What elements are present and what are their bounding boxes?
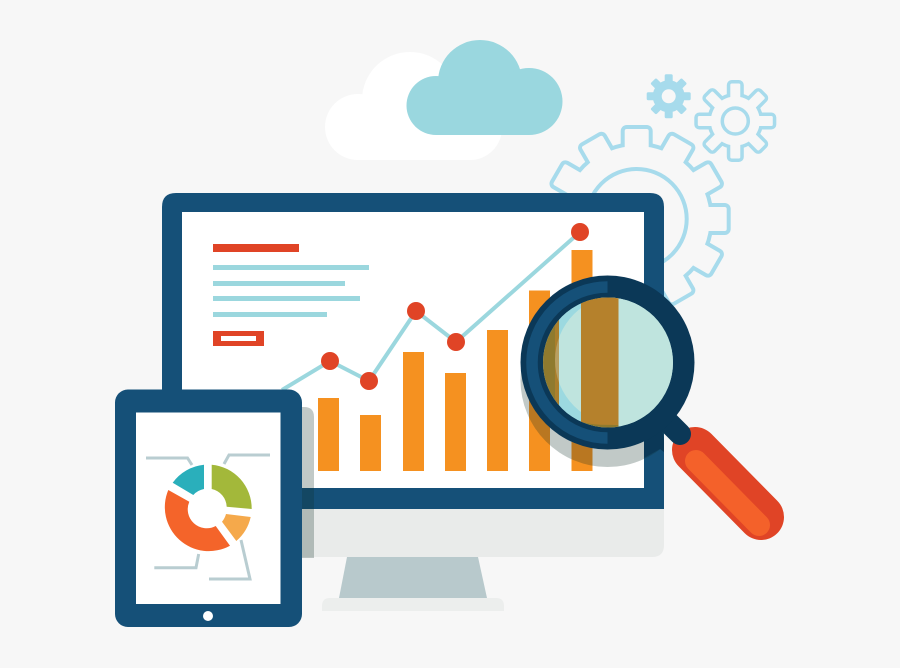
donut chart xyxy=(165,465,252,551)
blue cloud xyxy=(406,40,562,135)
icon: large gear outline xyxy=(547,129,727,309)
text block: report lines xyxy=(213,244,369,346)
tablet screen xyxy=(136,412,280,604)
monitor stand xyxy=(339,557,487,598)
line chart xyxy=(282,223,589,390)
bar chart xyxy=(318,250,592,471)
icon: medium gear outline xyxy=(698,84,773,158)
tablet shadow xyxy=(302,407,314,558)
magnifier ring xyxy=(520,276,694,450)
magnifier shadow xyxy=(520,372,664,467)
illustration: analytics dashboard xyxy=(115,40,784,627)
monitor screen xyxy=(182,212,644,488)
tablet home button xyxy=(203,611,213,621)
monitor frame xyxy=(162,193,664,509)
monitor chin xyxy=(162,500,664,557)
monitor base xyxy=(322,598,504,611)
icon: small solid gear xyxy=(647,74,691,118)
tablet body xyxy=(115,390,302,627)
donut leader lines xyxy=(146,455,270,579)
white cloud xyxy=(325,52,502,160)
magnifier lens xyxy=(543,298,673,428)
magnifier handle xyxy=(665,419,761,525)
